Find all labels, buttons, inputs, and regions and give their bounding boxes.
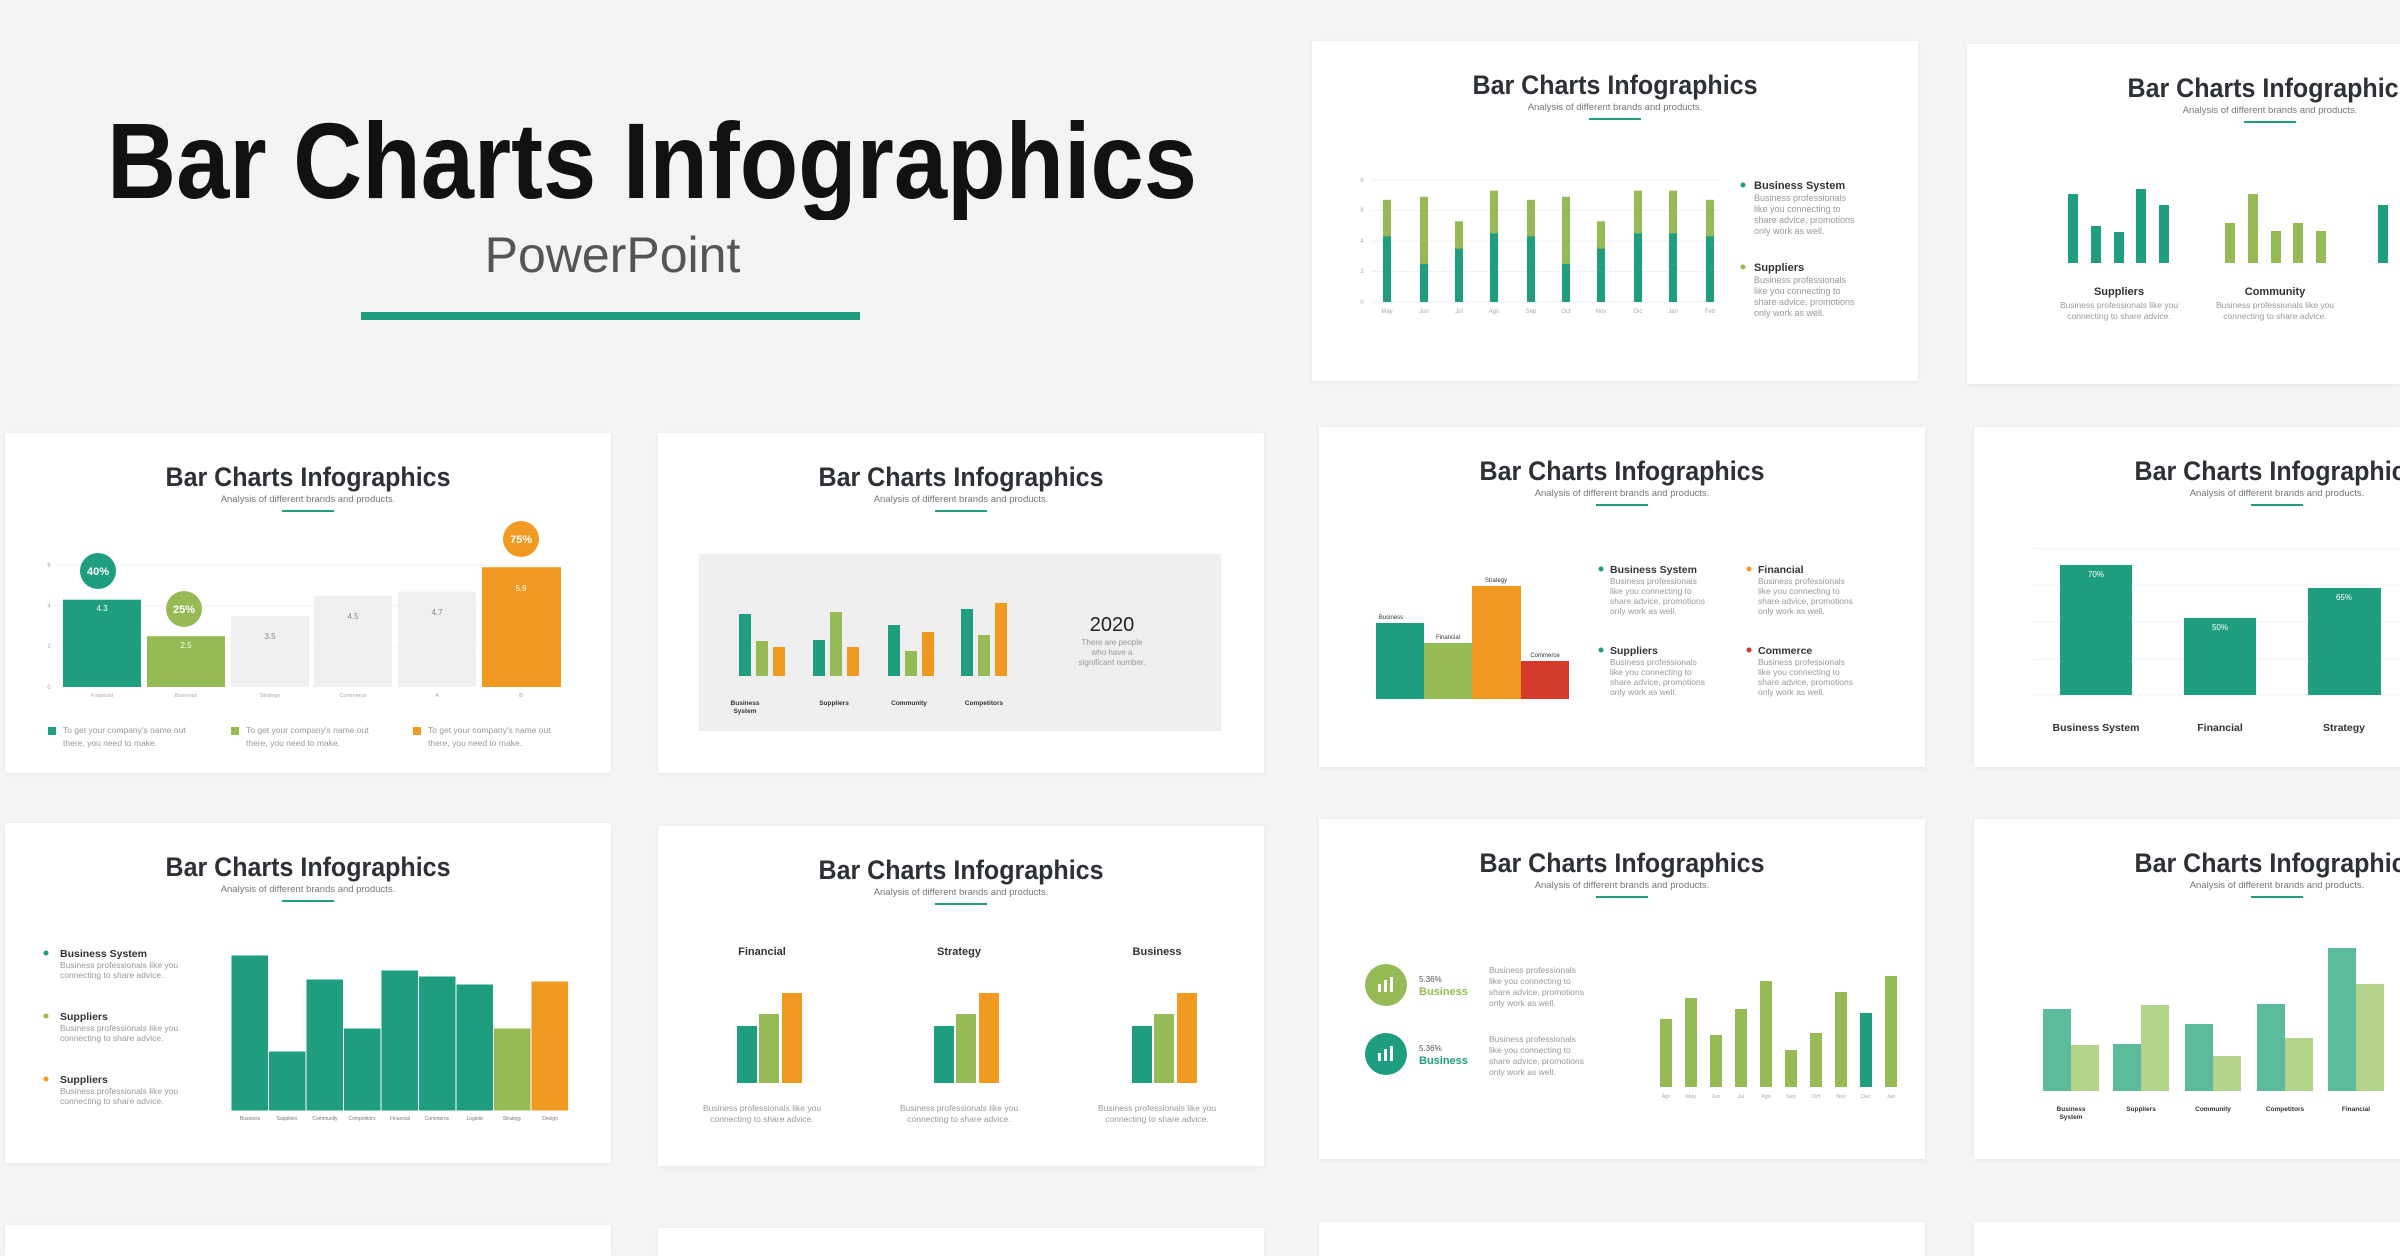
percentage circles: 25% (173, 604, 195, 616)
legend: Suppliers (60, 1011, 108, 1023)
mini charts: Business (1133, 946, 1181, 958)
legend: only work as well. (1610, 687, 1677, 697)
card: highlighted bars with percentages: Financial (91, 693, 113, 699)
legend: share advice, promotions (1754, 215, 1855, 225)
legend: share advice, promotions (1610, 596, 1705, 606)
legend: Business System (1610, 564, 1697, 576)
legend (44, 948, 178, 1106)
card: legend left, bars right: Suppliers (277, 1116, 298, 1122)
card: stacked bar chart: 6 (1360, 208, 1364, 214)
card: three small bar charts: Bar Charts Infographics (818, 855, 1104, 885)
card: highlighted bars with percentages: Business (175, 693, 197, 699)
bars (63, 567, 561, 687)
legend: Business professionals (1610, 657, 1697, 667)
2020 callout: who have a (1091, 648, 1133, 657)
card: icons with bars: Nov (1836, 1094, 1846, 1100)
card: legend left, bars right: Community (312, 1116, 338, 1122)
icon stats: share advice, promotions (1489, 1056, 1584, 1066)
bars (1376, 586, 1569, 699)
mini charts: Business professionals like you (900, 1103, 1018, 1113)
card: stacked bar chart: Nov (1596, 309, 1606, 315)
legend: like you connecting to (1754, 286, 1841, 296)
card: wide bars with four-item legend: Analysis of different brands and products. (1535, 488, 1709, 499)
card: percentage bars (partial): 50% (2212, 623, 2228, 632)
legend: Business professionals (1754, 275, 1847, 285)
card: stacked bar chart: May (1381, 309, 1393, 315)
card: highlighted bars with percentages: 4.3 (96, 604, 108, 613)
card: icons with bars: Oct (1812, 1094, 1821, 1100)
legend: Suppliers (1610, 645, 1658, 657)
card: stacked bar chart: Analysis of different brands and products. (1528, 102, 1702, 113)
card: highlighted bars with percentages: Commerce (340, 693, 366, 699)
card: percentage bars (partial): Financial (2197, 722, 2243, 734)
card: wide bars with four-item legend: Bar Charts Infographics (1480, 456, 1764, 486)
card: highlighted bars with percentages: 5.9 (515, 584, 527, 593)
legend: share advice, promotions (1758, 596, 1853, 606)
bottom partial cards (5, 1225, 611, 1256)
legend: connecting to share advice. (60, 970, 163, 980)
card: legend left, bars right: Strategy (503, 1116, 522, 1122)
card: paired light bars (partial): Analysis of different brands and products. (2190, 880, 2364, 891)
card: wide bars with four-item legend: Commerce (1530, 653, 1560, 659)
card: highlighted bars with percentages: Analysis of different brands and products. (221, 494, 395, 505)
card: highlighted bars with percentages: Strategy (260, 693, 280, 699)
legend: Suppliers (1754, 262, 1804, 274)
card: paired light bars (partial): Suppliers (2126, 1106, 2156, 1113)
legend: like you connecting to (1754, 204, 1841, 214)
legend: connecting to share advice. (60, 1096, 163, 1106)
legend: only work as well. (1610, 606, 1677, 616)
card: stacked bar chart: 4 (1360, 239, 1364, 245)
percentage circles: 40% (87, 566, 109, 578)
card: legend left, bars right (5, 823, 611, 1163)
icon stats: Business professionals (1489, 965, 1576, 975)
card: legend left, bars right: Logistic (467, 1116, 484, 1122)
card: legend left, bars right: Competitors (349, 1116, 376, 1122)
subtitle: PowerPoint: PowerPoint (485, 227, 740, 283)
card: icons with bars: Apr (1662, 1094, 1670, 1100)
card: wide bars with four-item legend (1319, 427, 1925, 767)
legend: Business professionals (1758, 657, 1845, 667)
card: percentage bars (partial): 65% (2336, 593, 2352, 602)
card: grouped bars in gray panel with 2020: Suppliers (819, 700, 849, 707)
card: icons with bars: Analysis of different brands and products. (1535, 880, 1709, 891)
card: stacked bar chart: Bar Charts Infographics (1472, 70, 1758, 100)
card: percentage bars (partial): Business System (2053, 722, 2139, 734)
icon stats: Business professionals (1489, 1034, 1576, 1044)
legend: Suppliers (60, 1074, 108, 1086)
icon stats: only work as well. (1489, 998, 1556, 1008)
legend: only work as well. (1758, 687, 1825, 697)
card: icons with bars: Jul (1737, 1094, 1745, 1100)
mini charts: Financial (738, 946, 786, 958)
card: stacked bar chart (1312, 41, 1918, 381)
card: icons with bars: Jan (1887, 1094, 1895, 1100)
2020 callout: significant number. (1079, 658, 1145, 667)
mini charts: connecting to share advice. (1105, 1114, 1209, 1124)
legend (1740, 180, 1855, 318)
card: stacked bar chart: Jan (1668, 309, 1678, 315)
grouped bars (739, 603, 1007, 676)
icon stats: share advice, promotions (1489, 987, 1584, 997)
legend: To get your company's name out (428, 725, 551, 735)
card: percentage bars (partial) (1974, 427, 2400, 767)
legend: share advice, promotions (1758, 677, 1853, 687)
paired bars (2043, 948, 2384, 1091)
card: grouped bars in gray panel with 2020 (658, 433, 1264, 773)
legend: Business System (60, 948, 147, 960)
card: stacked bar chart: Dic (1634, 309, 1642, 315)
legend: only work as well. (1754, 308, 1825, 318)
2020 callout: 2020 (1090, 614, 1134, 636)
card: icons with bars (1319, 819, 1925, 1159)
legend: connecting to share advice. (60, 1033, 163, 1043)
card: highlighted bars with percentages: 2 (47, 644, 51, 650)
card: grouped bars in gray panel with 2020: System (733, 708, 757, 715)
card: paired light bars (partial): Business (2057, 1106, 2086, 1113)
card: stacked bar chart: 2 (1360, 269, 1364, 275)
legend: To get your company's name out (246, 725, 369, 735)
icon stats: Business (1419, 986, 1468, 998)
card: highlighted bars with percentages: A (435, 693, 439, 699)
legend: Business professionals like you (60, 1023, 178, 1033)
bars (1660, 976, 1897, 1087)
title underline (361, 312, 860, 320)
icon stats (1365, 964, 1584, 1077)
icon stats: 5.36% (1419, 1044, 1442, 1053)
icon stats: like you connecting to (1489, 1045, 1571, 1055)
legend: only work as well. (1754, 226, 1825, 236)
card: wide bars with four-item legend: Business (1379, 615, 1403, 621)
legend: like you connecting to (1610, 586, 1692, 596)
card: stacked bar chart: Jul (1455, 309, 1463, 315)
legend: Business professionals (1610, 576, 1697, 586)
card: paired light bars (partial): System (2059, 1114, 2083, 1121)
legend: share advice, promotions (1754, 297, 1855, 307)
card: legend left, bars right: Business (240, 1116, 261, 1122)
card: paired light bars (partial): Financial (2342, 1106, 2370, 1113)
bars (231, 955, 568, 1111)
card: highlighted bars with percentages: 2.5 (180, 641, 192, 650)
card: grouped bars (partial): Business professionals like you (2216, 300, 2334, 310)
card: legend left, bars right: Financial (390, 1116, 410, 1122)
percentage circles (80, 521, 539, 627)
card: wide bars with four-item legend: Strategy (1485, 578, 1507, 584)
legend: like you connecting to (1758, 586, 1840, 596)
card: grouped bars in gray panel with 2020: Analysis of different brands and products. (874, 494, 1048, 505)
card: stacked bar chart: Sep (1526, 309, 1537, 315)
card: paired light bars (partial) (1974, 819, 2400, 1159)
card: stacked bar chart: Ago (1489, 309, 1500, 315)
card: grouped bars (partial): Community (2245, 286, 2306, 298)
mini charts: connecting to share advice. (907, 1114, 1011, 1124)
legend: Commerce (1758, 645, 1812, 657)
card: highlighted bars with percentages: 0 (47, 685, 51, 691)
card: highlighted bars with percentages: 4.5 (347, 612, 359, 621)
card: grouped bars (partial): Business professionals like you (2060, 300, 2178, 310)
bars (2068, 189, 2388, 263)
legend: Business professionals like you (60, 960, 178, 970)
card: legend left, bars right: Bar Charts Infographics (166, 852, 450, 882)
card: paired light bars (partial): Competitors (2266, 1106, 2305, 1113)
icon stats: Business (1419, 1055, 1468, 1067)
card: stacked bar chart: Jun (1419, 309, 1429, 315)
legend: there, you need to make. (63, 738, 157, 748)
2020 callout (1079, 614, 1145, 667)
card: stacked bar chart: 8 (1360, 178, 1364, 184)
legend: Business System (1754, 180, 1845, 192)
card: grouped bars in gray panel with 2020: Business (731, 700, 760, 707)
card: icons with bars: Sep (1786, 1094, 1796, 1100)
card: grouped bars in gray panel with 2020: Bar Charts Infographics (818, 462, 1104, 492)
card: wide bars with four-item legend: Financial (1436, 635, 1460, 641)
card: stacked bar chart: Feb (1705, 309, 1716, 315)
legend: Business professionals (1754, 193, 1847, 203)
card: percentage bars (partial): Analysis of different brands and products. (2190, 488, 2364, 499)
icon stats: 5.36% (1419, 975, 1442, 984)
icon stats: only work as well. (1489, 1067, 1556, 1077)
legend (1598, 564, 1853, 697)
legend: like you connecting to (1758, 667, 1840, 677)
legend: only work as well. (1758, 606, 1825, 616)
card: highlighted bars with percentages: B (519, 693, 523, 699)
legend: there, you need to make. (428, 738, 522, 748)
card: percentage bars (partial): 70% (2088, 570, 2104, 579)
card: grouped bars (partial): Suppliers (2094, 286, 2144, 298)
card: stacked bar chart: 0 (1360, 300, 1364, 306)
legend (48, 725, 551, 748)
card: highlighted bars with percentages: 4.7 (431, 608, 443, 617)
card: icons with bars: May (1686, 1094, 1696, 1100)
legend: there, you need to make. (246, 738, 340, 748)
card: grouped bars in gray panel with 2020: Competitors (965, 700, 1004, 707)
mini charts: Strategy (937, 946, 982, 958)
card: icons with bars: Ago (1761, 1094, 1771, 1100)
legend: Financial (1758, 564, 1804, 576)
card: grouped bars (partial): connecting to share advice. (2067, 311, 2171, 321)
card: legend left, bars right: Design (542, 1116, 558, 1122)
card: paired light bars (partial): Community (2195, 1106, 2231, 1113)
mini charts: connecting to share advice. (710, 1114, 814, 1124)
card: highlighted bars with percentages (5, 433, 611, 773)
card: icons with bars: Jun (1712, 1094, 1720, 1100)
card: grouped bars in gray panel with 2020: Community (891, 700, 927, 707)
card: three small bar charts: Analysis of different brands and products. (874, 887, 1048, 898)
icon stats: like you connecting to (1489, 976, 1571, 986)
card: grouped bars (partial): Analysis of different brands and products. (2183, 105, 2357, 116)
card: stacked bar chart: Oct (1561, 309, 1571, 315)
card: grouped bars (partial) (1967, 44, 2400, 384)
legend: share advice, promotions (1610, 677, 1705, 687)
card: three small bar charts (658, 826, 1264, 1166)
mini charts (703, 946, 1216, 1124)
card: highlighted bars with percentages: 6 (47, 563, 51, 569)
card: highlighted bars with percentages: 3.5 (264, 632, 276, 641)
card: legend left, bars right: Analysis of different brands and products. (221, 884, 395, 895)
percentage circles: 75% (510, 534, 532, 546)
mini charts: Business professionals like you (1098, 1103, 1216, 1113)
card: legend left, bars right: Commerce (425, 1116, 449, 1122)
card: highlighted bars with percentages: 4 (47, 604, 51, 610)
legend: To get your company's name out (63, 725, 186, 735)
bars (2060, 565, 2381, 695)
mini charts: Business professionals like you (703, 1103, 821, 1113)
legend: Business professionals (1758, 576, 1845, 586)
card: percentage bars (partial): Strategy (2323, 722, 2365, 734)
legend: like you connecting to (1610, 667, 1692, 677)
card: highlighted bars with percentages: Bar Charts Infographics (166, 462, 450, 492)
card: icons with bars: Bar Charts Infographics (1480, 848, 1764, 878)
card: icons with bars: Dec (1861, 1094, 1871, 1100)
card: grouped bars (partial): connecting to share advice. (2223, 311, 2327, 321)
stacked bars (1383, 191, 1714, 302)
2020 callout: There are people (1082, 638, 1143, 647)
legend: Business professionals like you (60, 1086, 178, 1096)
